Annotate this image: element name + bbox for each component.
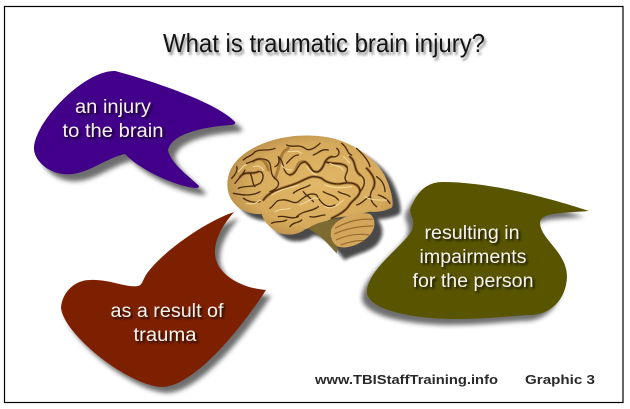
callout text (412, 223, 534, 292)
highlights (238, 151, 387, 212)
callout: an injury to the brain (34, 71, 242, 195)
callout text: resulting in (424, 223, 520, 244)
footer: graphic number: Graphic 3 (525, 372, 595, 387)
callout text: as a result of (110, 301, 224, 322)
title: What is traumatic brain injury? (163, 28, 485, 58)
callout: as a result of trauma (61, 212, 271, 393)
footer: website: www.TBIStaffTraining.info (314, 372, 498, 387)
callout text (62, 97, 164, 142)
callout text: for the person (412, 271, 534, 292)
callout text: trauma (134, 325, 197, 346)
sulci (232, 143, 390, 227)
callout text: to the brain (62, 121, 164, 142)
callout: resulting in impairments for the person (362, 182, 589, 325)
callout text (110, 301, 224, 346)
callout text: impairments (420, 247, 526, 268)
cerebellum (308, 213, 374, 253)
callout text: an injury (75, 97, 152, 118)
icon: brain (227, 135, 401, 260)
sulci shading (240, 148, 375, 218)
